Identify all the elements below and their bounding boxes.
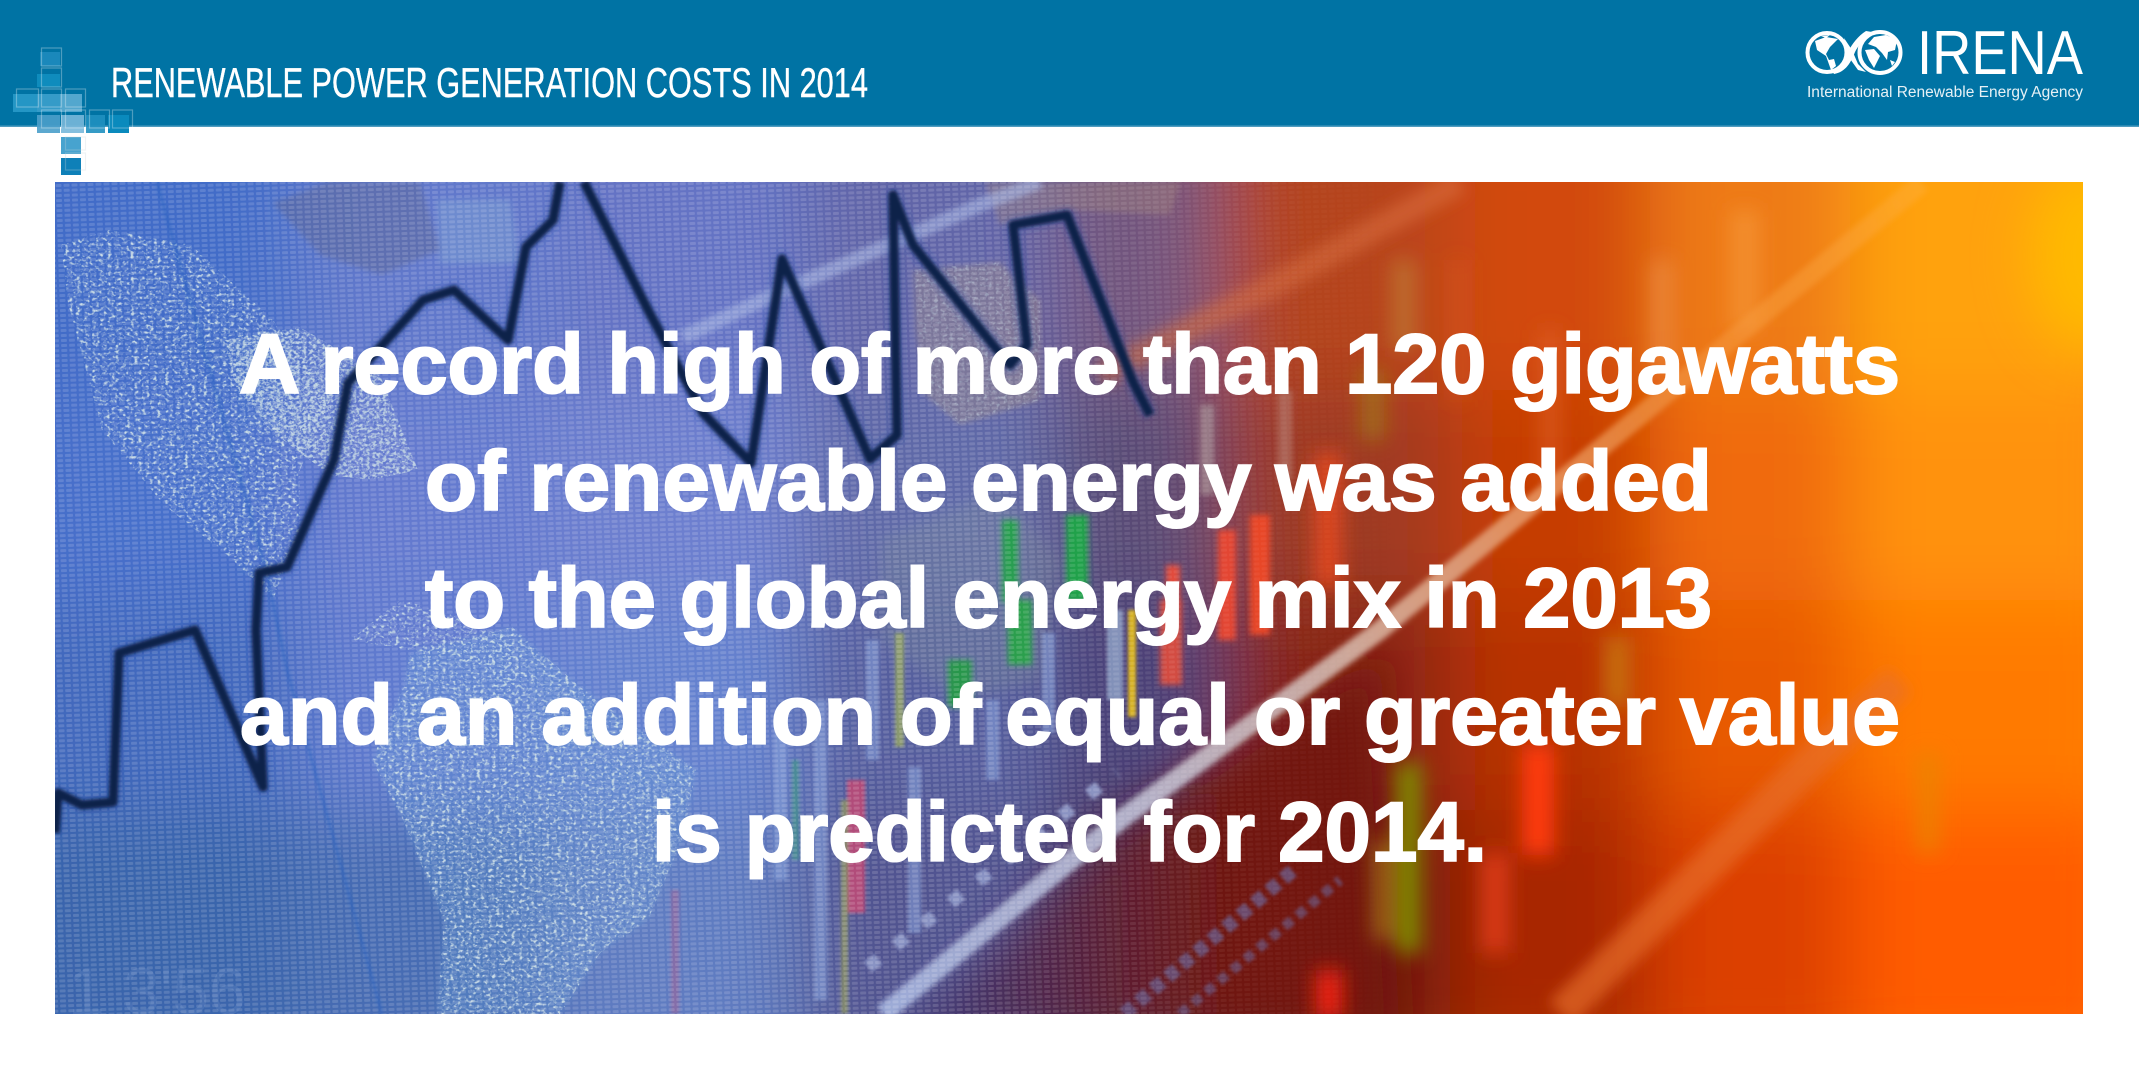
yellow glow top right bbox=[2022, 182, 2083, 356]
headline line 5: is predicted for 2014. bbox=[652, 785, 1487, 879]
diagonal light streaks bbox=[683, 182, 1922, 1014]
map: North America coast speckle bbox=[61, 230, 330, 600]
headline text bbox=[239, 317, 1900, 879]
map: South America tint bbox=[372, 627, 696, 1014]
photo base tone bbox=[55, 182, 2083, 1014]
map: faint landmasses bbox=[273, 182, 1180, 700]
logo wordmark: IRENA bbox=[1917, 19, 2084, 88]
panel: market chart photo background bbox=[55, 182, 2083, 1014]
pink, olive, pale and yellow ticker bars bbox=[671, 610, 1136, 1014]
headline line 4: and an addition of equal or greater value bbox=[240, 668, 1900, 762]
map: South America speckle bbox=[372, 627, 696, 1014]
title: RENEWABLE POWER GENERATION COSTS IN 2014 bbox=[111, 59, 868, 106]
icon: mosaic of squares bbox=[13, 48, 132, 175]
mosaic outlines bbox=[16, 48, 132, 170]
photo colour field bbox=[55, 182, 2083, 1014]
dark wedge below main band bbox=[900, 650, 1400, 1040]
logo: IRENA bbox=[1807, 19, 2084, 101]
mosaic filled squares bbox=[13, 52, 129, 175]
thin vertical blue trace bbox=[157, 182, 382, 1014]
sharper red and pale bars bbox=[1160, 390, 1292, 685]
headline line 2: of renewable energy was added bbox=[425, 434, 1712, 528]
chart line bbox=[55, 182, 1150, 833]
map: North America dense speckle bbox=[225, 327, 418, 480]
logo tagline: International Renewable Energy Agency bbox=[1807, 84, 2083, 101]
headline line 1: A record high of more than 120 gigawatts bbox=[239, 317, 1900, 411]
map: Africa speckle bbox=[913, 262, 1040, 425]
blurred price bars bbox=[1315, 210, 1940, 1020]
header band bbox=[0, 0, 2139, 127]
faint screen digits: 1 3'56 bbox=[68, 954, 246, 1028]
icon: infinity globes bbox=[1808, 31, 1900, 74]
map: Central America speckle bbox=[350, 600, 520, 700]
mesh screen texture bbox=[55, 182, 1298, 1014]
headline line 3: to the global energy mix in 2013 bbox=[425, 551, 1712, 645]
green ticker bars bbox=[948, 515, 1088, 707]
